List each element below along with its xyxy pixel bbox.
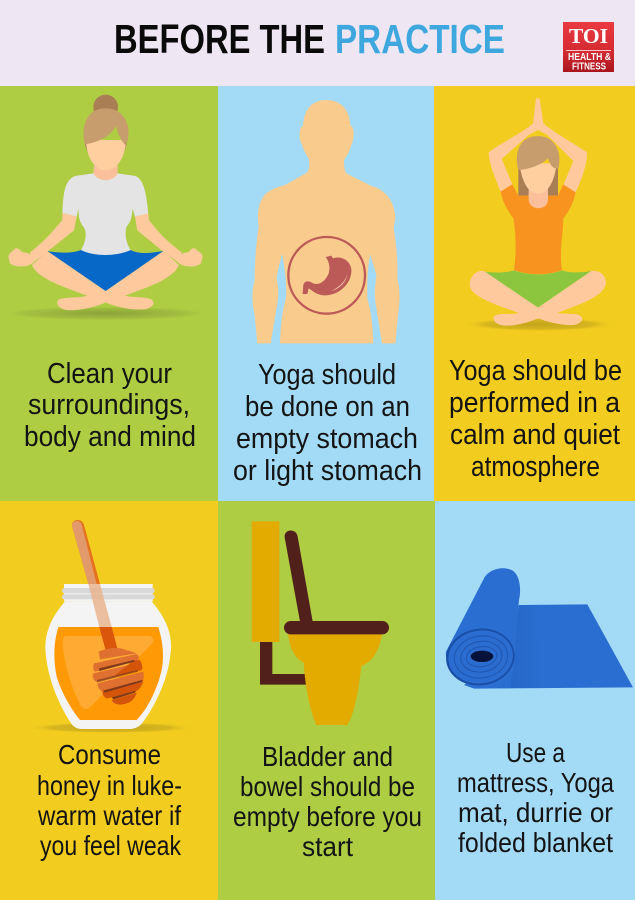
icon: toilet	[252, 521, 389, 725]
icon: honey jar with dipper	[26, 520, 196, 733]
caption: bowel should be	[240, 771, 415, 802]
caption: or light stomach	[233, 455, 422, 487]
caption: Consume	[58, 739, 161, 770]
caption	[233, 359, 422, 487]
title: PRACTICE	[335, 16, 505, 62]
logo: TOI Health & Fitness: HEALTH &	[568, 52, 611, 63]
caption: Use a	[506, 737, 566, 768]
icon: woman with raised arms	[462, 98, 617, 331]
caption: be done on an	[245, 391, 410, 423]
caption	[37, 739, 182, 861]
caption: empty stomach	[236, 423, 418, 455]
caption: surroundings,	[28, 389, 190, 421]
caption: start	[302, 831, 353, 862]
caption: mat, durrie or	[458, 797, 613, 828]
caption: Clean your	[47, 358, 172, 390]
panel: calm atmosphere	[434, 86, 635, 501]
panel: honey	[0, 501, 218, 900]
caption: body and mind	[24, 421, 196, 453]
caption: performed in a	[449, 387, 621, 419]
caption: folded blanket	[458, 827, 613, 858]
caption	[457, 737, 615, 858]
panel: bladder and bowel	[218, 501, 435, 900]
header band	[0, 0, 635, 86]
panel: empty stomach	[218, 86, 434, 501]
caption: you feel weak	[40, 830, 181, 861]
logo: TOI Health & Fitness: TOI	[569, 24, 608, 48]
logo: TOI Health & Fitness: FITNESS	[572, 62, 606, 72]
icon: rolled yoga mat	[442, 568, 633, 690]
title	[114, 16, 505, 62]
panel: clean surroundings	[0, 86, 218, 501]
caption	[24, 358, 196, 453]
caption: Yoga should	[258, 359, 396, 391]
icon: meditating woman	[4, 95, 207, 320]
caption: mattress, Yoga	[457, 767, 615, 798]
caption: calm and quiet	[450, 419, 620, 451]
caption: Bladder and	[262, 741, 393, 772]
panel: yoga mat	[435, 501, 635, 900]
caption: atmosphere	[471, 451, 600, 483]
caption	[233, 741, 422, 862]
logo: TOI Health & Fitness	[563, 22, 614, 72]
title: BEFORE THE	[114, 16, 325, 62]
icon: body with stomach	[252, 100, 400, 343]
caption: empty before you	[233, 801, 422, 832]
caption: honey in luke-	[37, 770, 182, 801]
caption	[449, 355, 622, 483]
caption: warm water if	[37, 800, 181, 831]
